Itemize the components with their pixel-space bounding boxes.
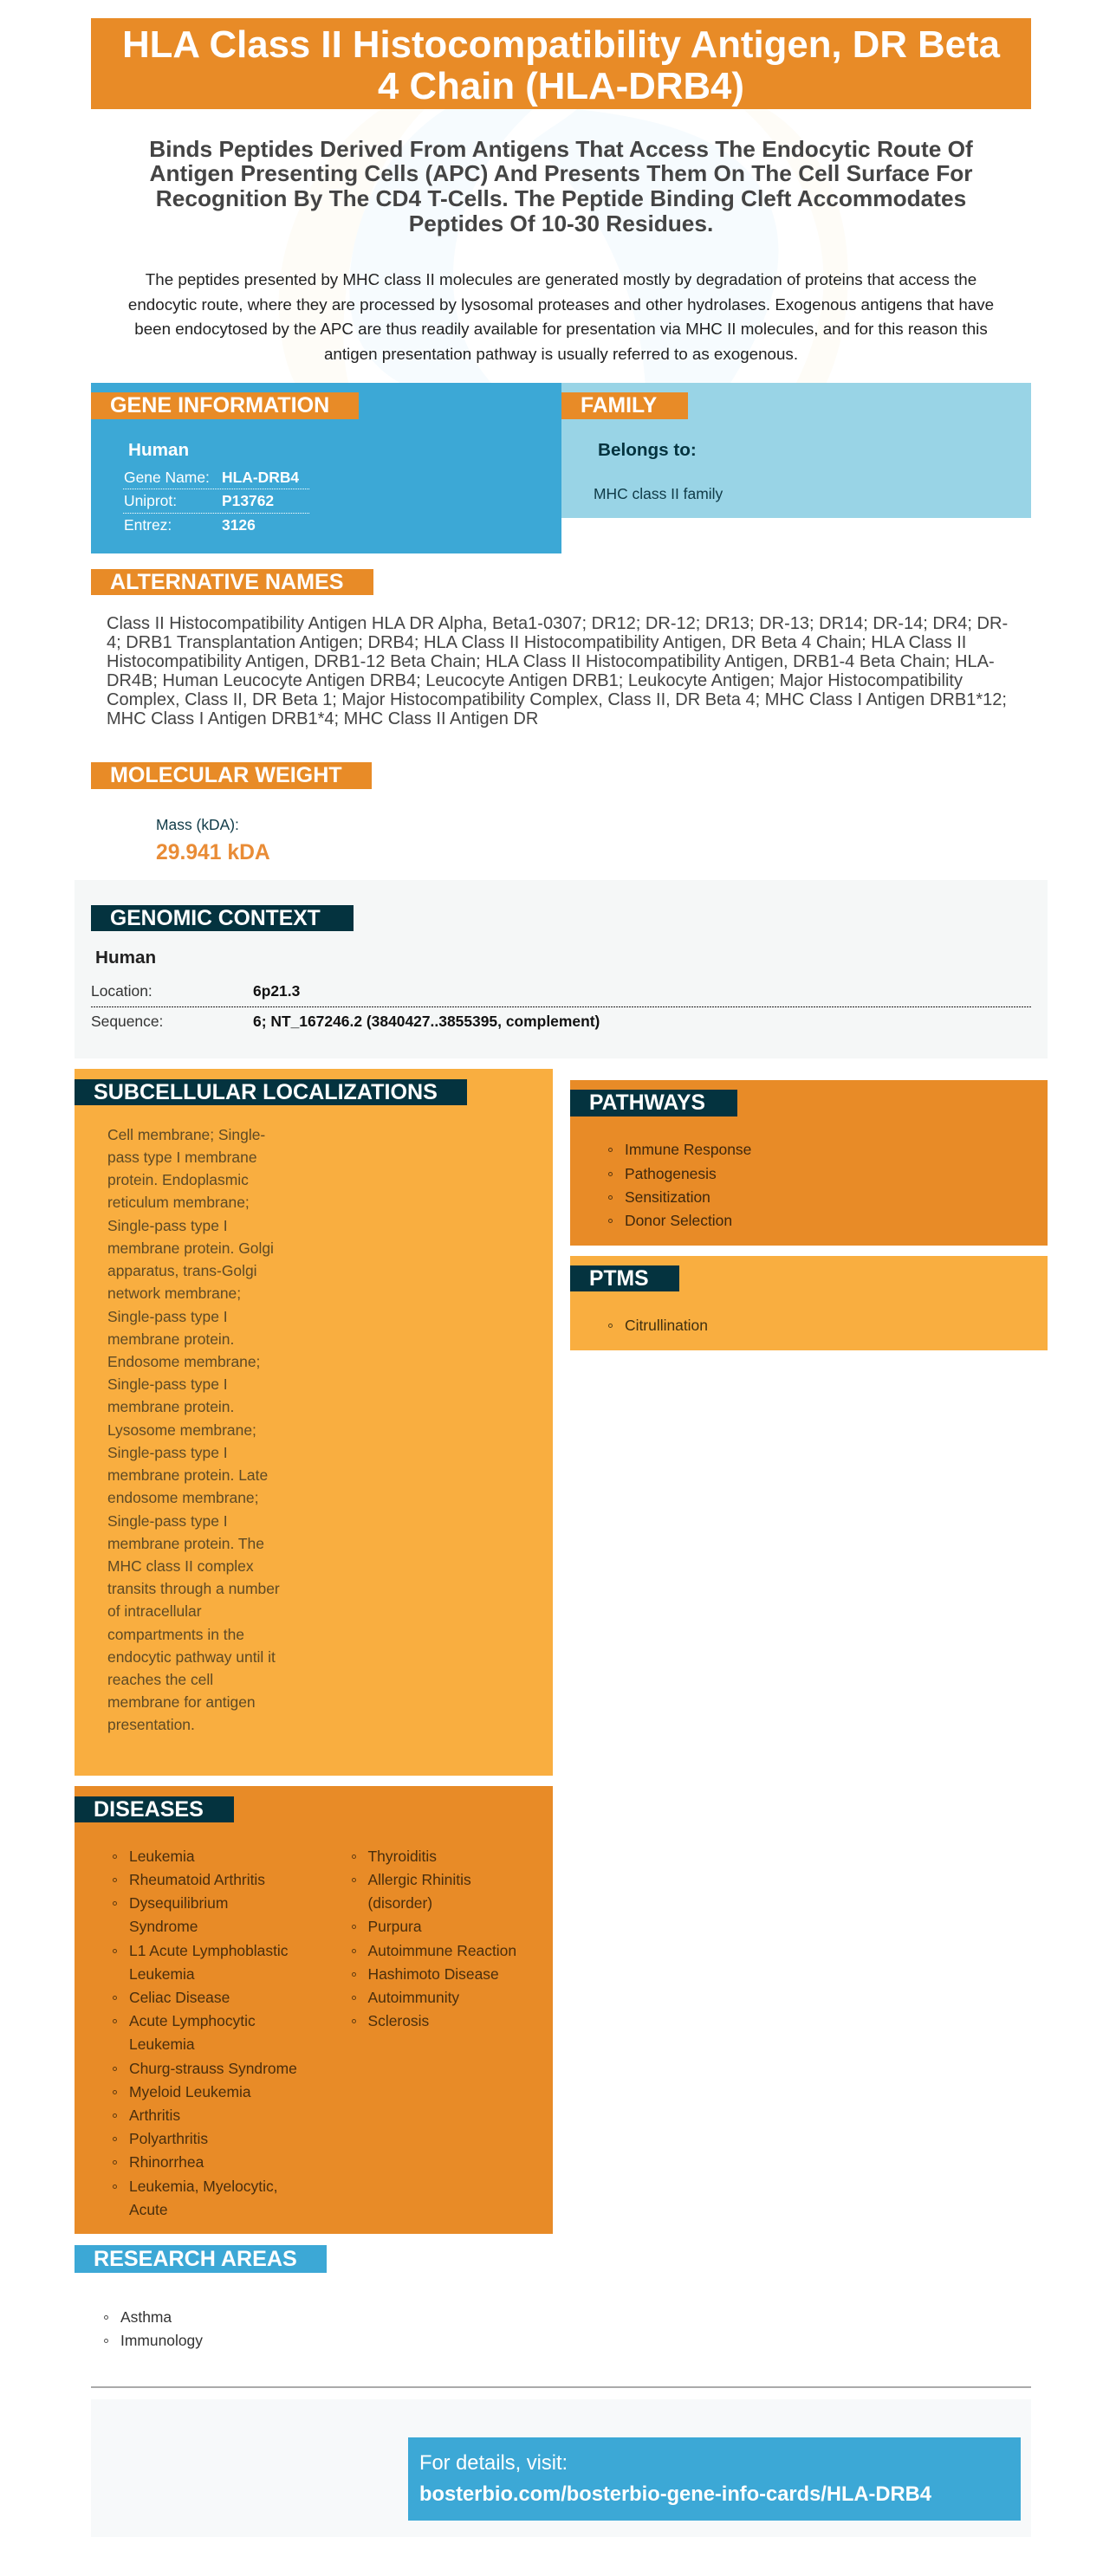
alternative names text: Class II Histocompatibility Antigen HLA DR Alpha, Beta1-0307; DR12; DR-12; DR13; DR-13; DR14; DR-14; DR4; DR- xyxy=(107,613,1008,632)
sequence row: 6; NT_167246.2 (3840427..3855395, complement) xyxy=(253,1013,600,1030)
subtitle: function summary xyxy=(149,136,973,236)
subcellular localization text: endosome membrane; xyxy=(107,1489,258,1506)
entrez row: 3126 xyxy=(222,516,256,534)
subcellular localization text: Endosome membrane; xyxy=(107,1353,260,1370)
description paragraph: antigen presentation pathway is usually referred to as exogenous. xyxy=(324,345,798,362)
panel: subcellular localizations xyxy=(75,1069,553,1776)
description paragraph: been endocytosed by the APC are thus readily available for presentation via MHC II molecules, and for this reason this xyxy=(134,320,988,338)
gene name row: Gene Name: xyxy=(124,469,210,486)
subcellular localization text: membrane protein. Golgi xyxy=(107,1239,274,1257)
alternative names text: Complex, Class II, DR Beta 1; Major Histocompatibility Complex, Class II, DR Beta 4; MHC Class I Antigen DRB1*12; xyxy=(107,689,1007,709)
diseases list: column one: Acute xyxy=(129,2201,168,2218)
subcellular localization text: membrane protein. xyxy=(107,1330,234,1348)
subcellular localization text: of intracellular xyxy=(107,1602,202,1620)
diseases list: column one: Rheumatoid Arthritis xyxy=(129,1871,265,1888)
subcellular localization text: membrane protein. xyxy=(107,1398,234,1415)
diseases list: column one: Celiac Disease xyxy=(129,1989,230,2006)
diseases list: column two: (disorder) xyxy=(367,1894,432,1912)
panel: ptms xyxy=(570,1256,1048,1350)
subcellular localization text: MHC class II complex xyxy=(107,1557,254,1575)
subcellular localization text: Single-pass type I xyxy=(107,1444,228,1461)
diseases list: column two: Purpura xyxy=(367,1918,422,1935)
pathways list: Donor Selection xyxy=(625,1212,732,1229)
diseases list: column one: Arthritis xyxy=(129,2107,180,2124)
diseases list: column two xyxy=(352,1848,516,2029)
alternative names text: DR4B; Human Leucocyte Antigen DRB4; Leucocyte Antigen DRB1; Leukocyte Antigen; Major Histocompatibility xyxy=(107,670,963,689)
subcellular localization text: membrane protein. Late xyxy=(107,1466,268,1484)
subcellular localization text: pass type I membrane xyxy=(107,1149,257,1166)
pathways list xyxy=(608,1141,751,1229)
subcellular localization text: Single-pass type I xyxy=(107,1375,228,1393)
heading: pathways: PATHWAYS xyxy=(589,1091,705,1115)
subtitle: function summary: Recognition By The CD4 T-Cells. The Peptide Binding Cleft Accommodates xyxy=(156,185,966,211)
subcellular localization text: protein. Endoplasmic xyxy=(107,1171,249,1188)
alternative names text: MHC Class I Antigen DRB1*4; MHC Class II Antigen DR xyxy=(107,709,538,728)
diseases list: column one: Myeloid Leukemia xyxy=(129,2083,251,2100)
subcellular localization text: reticulum membrane; xyxy=(107,1194,250,1211)
diseases list: column one: Leukemia xyxy=(129,2036,195,2053)
subtitle: function summary: Peptides Of 10-30 Residues. xyxy=(409,210,713,236)
heading: genomic context: GENOMIC CONTEXT xyxy=(110,907,321,930)
subcellular localization text: apparatus, trans-Golgi xyxy=(107,1262,257,1279)
background watermark logo xyxy=(350,109,778,383)
subcellular localization text: network membrane; xyxy=(107,1285,241,1302)
diseases list: column one: Leukemia xyxy=(129,1848,195,1865)
research areas list: Immunology xyxy=(120,2332,203,2349)
diseases list: column two: Autoimmune Reaction xyxy=(367,1942,516,1959)
diseases list: column one: Churg-strauss Syndrome xyxy=(129,2060,297,2077)
subcellular localization text: membrane protein. The xyxy=(107,1535,264,1552)
subcellular localization text: endocytic pathway until it xyxy=(107,1648,276,1666)
diseases list: column one: Polyarthritis xyxy=(129,2130,208,2147)
diseases list: column one: Leukemia xyxy=(129,1965,195,1983)
diseases list: column one: Leukemia, Myelocytic, xyxy=(129,2178,278,2195)
heading: alternative names: ALTERNATIVE NAMES xyxy=(110,570,344,594)
ptms list: Citrullination xyxy=(625,1317,708,1334)
heading: ptms xyxy=(570,1265,679,1291)
description paragraph: endocytic route, where they are processed by lysosomal proteases and other hydrolases. Exogenous antigens that have xyxy=(128,294,994,314)
heading: family: FAMILY xyxy=(581,394,657,417)
diseases list: column two: Thyroiditis xyxy=(367,1848,437,1865)
heading: pathways xyxy=(570,1090,737,1116)
uniprot row: P13762 xyxy=(222,492,274,509)
subcellular localization text: Single-pass type I xyxy=(107,1512,228,1530)
alternative names text: Histocompatibility Antigen, DRB1-12 Beta Chain; HLA Class II Histocompatibility Antigen, DRB1-4 Beta Chain; HLA- xyxy=(107,651,995,670)
panel: footer xyxy=(91,2399,1031,2537)
diseases list: column two: Sclerosis xyxy=(367,2012,429,2029)
subcellular localization text: reaches the cell xyxy=(107,1671,213,1688)
uniprot row xyxy=(124,492,274,509)
entrez row: Entrez: xyxy=(124,516,172,534)
diseases list: column one: Dysequilibrium xyxy=(129,1894,228,1912)
heading: molecular weight: MOLECULAR WEIGHT xyxy=(110,763,342,787)
mass value: 29.941 kDA xyxy=(156,841,270,864)
panel: genomic context xyxy=(75,880,1048,1058)
description paragraph xyxy=(128,270,994,363)
panel: family xyxy=(561,383,1031,518)
subcellular localization text: Single-pass type I xyxy=(107,1308,228,1325)
diseases list: column one: Rhinorrhea xyxy=(129,2153,204,2171)
species label: Human xyxy=(128,440,189,460)
heading: ptms: PTMS xyxy=(589,1267,649,1291)
subcellular localization text: transits through a number xyxy=(107,1580,280,1597)
description paragraph: The peptides presented by MHC class II molecules are generated mostly by degradation of proteins that access the xyxy=(146,270,976,288)
diseases list: column two: Allergic Rhinitis xyxy=(367,1871,471,1888)
location row: 6p21.3 xyxy=(253,982,300,1000)
mass label: Mass (kDA): xyxy=(156,816,239,833)
location row: Location: xyxy=(91,982,152,1000)
heading: gene information: GENE INFORMATION xyxy=(110,393,329,417)
belongs to label: Belongs to: xyxy=(598,440,697,460)
subcellular localization text: Lysosome membrane; xyxy=(107,1421,256,1439)
details url: bosterbio.com/bosterbio-gene-info-cards/HLA-DRB4 xyxy=(419,2483,931,2506)
title text: HLA Class II Histocompatibility Antigen, DR Beta xyxy=(122,23,1000,66)
diseases list: column one: Syndrome xyxy=(129,1918,198,1935)
location row xyxy=(91,982,300,1000)
research areas list: Asthma xyxy=(120,2307,172,2325)
pathways list: Sensitization xyxy=(625,1188,710,1206)
heading: research areas: RESEARCH AREAS xyxy=(94,2247,297,2271)
heading: subcellular localizations: SUBCELLULAR LOCALIZATIONS xyxy=(94,1080,438,1104)
subtitle: function summary: Binds Peptides Derived From Antigens That Access The Endocytic Route Of xyxy=(149,136,973,162)
gene name row xyxy=(124,469,299,486)
diseases list: column one xyxy=(113,1848,297,2218)
subcellular localization text: presentation. xyxy=(107,1716,195,1733)
panel: gene information xyxy=(91,383,561,553)
title banner xyxy=(91,18,1031,109)
species label: Human xyxy=(95,948,156,968)
panel: diseases xyxy=(75,1786,553,2234)
sequence row xyxy=(91,1013,600,1030)
subcellular localization text: Cell membrane; Single- xyxy=(107,1126,265,1143)
gene name row: HLA-DRB4 xyxy=(222,469,299,486)
heading: diseases xyxy=(75,1796,234,1822)
research areas list xyxy=(104,2307,203,2349)
title text xyxy=(122,23,1000,107)
subtitle: function summary: Antigen Presenting Cells (APC) And Presents Them On The Cell Surface For xyxy=(149,160,973,186)
diseases list: column two: Autoimmunity xyxy=(367,1989,459,2006)
alternative names text xyxy=(107,613,1008,728)
subcellular localization text xyxy=(107,1126,280,1733)
callout: details link xyxy=(408,2437,1021,2521)
entrez row xyxy=(124,516,256,534)
family name: MHC class II family xyxy=(594,485,723,502)
uniprot row: Uniprot: xyxy=(124,492,177,509)
subcellular localization text: membrane for antigen xyxy=(107,1693,256,1711)
alternative names text: 4; DRB1 Transplantation Antigen; DRB4; HLA Class II Histocompatibility Antigen, DR Beta 4 Chain; HLA Class II xyxy=(107,632,966,651)
details label: For details, visit: xyxy=(419,2452,568,2475)
pathways list: Pathogenesis xyxy=(625,1165,717,1182)
diseases list: column two: Hashimoto Disease xyxy=(367,1965,499,1983)
sequence row: Sequence: xyxy=(91,1013,163,1030)
panel: pathways xyxy=(570,1080,1048,1246)
pathways list: Immune Response xyxy=(625,1141,751,1158)
heading: diseases: DISEASES xyxy=(94,1797,204,1822)
heading: family xyxy=(561,392,688,419)
title text: 4 Chain (HLA-DRB4) xyxy=(378,65,744,107)
diseases list: column one: Acute Lymphocytic xyxy=(129,2012,256,2029)
subcellular localization text: Single-pass type I xyxy=(107,1217,228,1234)
subcellular localization text: compartments in the xyxy=(107,1626,244,1643)
diseases list: column one: L1 Acute Lymphoblastic xyxy=(129,1942,289,1959)
